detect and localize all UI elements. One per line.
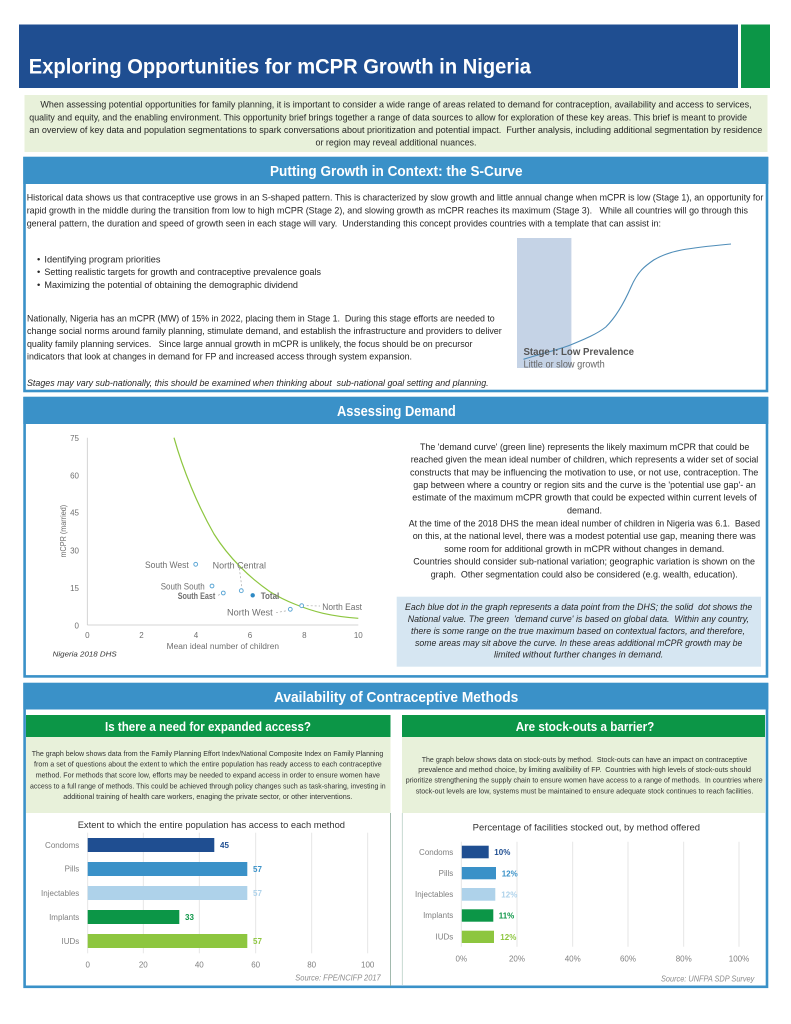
bar chart: stock-outs by method: Source: UNFPA SDP Survey: [661, 974, 755, 983]
sub-heading: stock-outs: Are stock-outs a barrier?: [516, 719, 654, 734]
bar chart: access by method: 0: [85, 960, 90, 970]
bar chart: stock-outs by method: 11%: [499, 912, 514, 920]
bullet list: Setting realistic targets for growth and contraceptive prevalence goals: [44, 266, 321, 277]
S-curve chart: Little or slow growth: [524, 358, 605, 370]
expanded access text: [30, 749, 386, 801]
bar chart: stock-outs by method: Percentage of facilities stocked out, by method offered: [473, 822, 700, 833]
demand curve scatter chart: Mean ideal number of children: [167, 642, 279, 651]
bar chart: stock-outs by method: [415, 822, 755, 983]
S-curve description: Historical data shows us that contraceptive use grows in an S-shaped pattern. This is characterized by slow growth and little annual change when mCPR is low (Stage 1), an opportunity for: [27, 192, 763, 203]
demand curve explanation: reached given the mean ideal number of children, which represents a wider set of social: [411, 454, 758, 465]
bar chart: access by method: 57: [253, 865, 262, 874]
demand curve scatter chart: South East: [178, 591, 215, 601]
demand curve scatter chart: South South: [161, 582, 205, 592]
callout: how to read the graph: some areas may sit above the curve. In these areas additional mCPR growth may be: [415, 638, 742, 648]
bar chart: access by method: Implants: [49, 913, 79, 922]
bar chart: stock-outs by method: 10%: [494, 848, 510, 857]
bar chart: stock-outs by method: Condoms: [419, 848, 453, 857]
title: Exploring Opportunities for mCPR Growth in Nigeria: [29, 54, 532, 78]
demand curve scatter chart: South West: [145, 560, 189, 570]
S-curve chart: Stage I: Low Prevalence: [524, 346, 634, 358]
bar chart: access by method: 57: [253, 937, 262, 946]
demand curve explanation: demand.: [567, 505, 602, 516]
title banner: [19, 24, 738, 88]
bar chart: access by method: [41, 819, 381, 983]
stock-outs text: stock-out levels are low, systems must be maintained to ensure adequate stock continues to reach facilities.: [416, 787, 753, 796]
bar chart: stock-outs by method: Implants: [423, 911, 453, 920]
panel: assessing demand: [23, 397, 768, 676]
heading: assessing demand: Assessing Demand: [337, 403, 456, 420]
demand curve scatter chart: 6: [248, 631, 253, 640]
italic note: Stages may vary sub-nationally, this should be examined when thinking about sub-national goal setting and planning.: [27, 378, 489, 388]
bullet list: •: [37, 266, 40, 277]
bar chart: stock-outs by method: 20%: [509, 955, 525, 964]
bar chart: stock-outs by method: IUDs: [436, 932, 453, 942]
intro text box: or region may reveal additional nuances.: [316, 137, 476, 148]
demand curve scatter chart: North East: [322, 602, 363, 612]
intro text box: quality and equity, and the enabling environment. This opportunity brief brings together a range of data sources to allow for exploration of these key areas. This brief is meant to provide: [29, 111, 747, 122]
bar chart: access by method: IUDs: [62, 937, 79, 946]
stock-outs text: prioritize strengthening the supply chain to ensure women have access to a range of methods. In countries where: [406, 776, 763, 785]
demand curve explanation: At the time of the 2018 DHS the mean ideal number of children in Nigeria was 6.1. Based: [409, 517, 760, 528]
demand curve explanation: gap between where a country or region sits and the curve is the 'potential use gap'- an: [413, 479, 756, 490]
stock-outs text: The graph below shows data on stock-outs by method. Stock-outs can have an impact on contraceptive: [422, 755, 747, 764]
Nigeria stage text: indicators that look at changes in demand for FP and increased access through system expansion.: [27, 350, 412, 362]
demand curve explanation: The 'demand curve' (green line) represents the likely maximum mCPR that could be: [420, 441, 749, 452]
expanded access text: from a set of questions about the extent to which the entire population has ready access to each contraceptive: [34, 760, 382, 769]
demand curve scatter chart: Nigeria 2018 DHS: [53, 650, 117, 658]
demand curve explanation: constructs that may be influencing the motivation to use, or not use, contraception. The: [410, 467, 758, 478]
demand curve scatter chart: 60: [70, 471, 80, 480]
demand curve explanation: Countries should consider sub-national variation; geographic variation is shown on the: [413, 556, 755, 567]
demand curve scatter chart: North Central: [213, 561, 266, 571]
sub-panel: stock-outs: [402, 715, 765, 985]
bar chart: stock-outs by method: 12%: [502, 870, 518, 878]
intro text box: an overview of key data and population segmentations to spark conversations about prioritization and potential impact. Further analysis, including additional segmentation by residence: [29, 124, 762, 135]
demand curve scatter chart: 45: [70, 509, 80, 518]
demand curve scatter chart: 30: [70, 546, 80, 555]
bar chart: stock-outs by method: 40%: [565, 955, 581, 964]
callout: how to read the graph: National value. The green 'demand curve' is based on global data. Within any country,: [408, 614, 749, 624]
demand curve scatter chart: 8: [302, 631, 307, 640]
demand curve scatter chart: 2: [139, 631, 144, 640]
demand curve explanation: graph. Other segmentation could also be considered (e.g. wealth, education).: [431, 568, 738, 579]
expanded access text: The graph below shows data from the Family Planning Effort Index/National Composite Index on Family Planning: [32, 749, 383, 758]
bar chart: stock-outs by method: Pills: [439, 869, 453, 878]
bar chart: access by method: 80: [307, 960, 317, 970]
S-curve description: general pattern, the duration and speed of growth seen in each stage will vary. Understanding this concept provides countries with a template that can assist in:: [27, 217, 661, 228]
bullet list: •: [37, 254, 40, 264]
bar chart: access by method: 57: [253, 889, 262, 898]
expanded access text: method. For methods that score low, efforts may be needed to expand access in order to ensure women have: [36, 770, 380, 779]
stock-outs text: prevalence and method choice, by limiting avalibility of FP. Countries with high levels of stock-outs should: [418, 765, 751, 774]
demand curve scatter chart: 0: [85, 631, 90, 640]
expanded access text: additional training of health care workers, enaging the private sector, or other interventions.: [63, 792, 352, 801]
demand curve scatter chart: 0: [75, 621, 80, 630]
bullet list: [37, 254, 321, 290]
callout: how to read the graph: [397, 597, 761, 667]
callout: how to read the graph: limited without further changes in demand.: [494, 649, 663, 659]
bar chart: access by method: 100: [361, 960, 375, 970]
demand curve scatter chart: 10: [354, 631, 363, 640]
bar chart: stock-outs by method: 12%: [501, 890, 517, 900]
bar chart: stock-outs by method: 12%: [500, 933, 516, 942]
bar chart: access by method: Condoms: [45, 841, 79, 850]
heading: S-curve: Putting Growth in Context: the S-Curve: [270, 163, 522, 180]
panel: S-curve context: [23, 157, 768, 391]
demand curve explanation: [409, 441, 760, 579]
bar chart: stock-outs by method: 80%: [676, 955, 692, 964]
bar chart: access by method: 45: [220, 841, 229, 850]
bar chart: access by method: Extent to which the entire population has access to each method: [78, 819, 345, 830]
S-curve description: [27, 192, 763, 228]
green accent block: [741, 24, 770, 88]
demand curve scatter chart: North West: [227, 608, 273, 618]
sub-heading: expanded access: Is there a need for expanded access?: [105, 719, 311, 734]
callout: how to read the graph: Each blue dot in the graph represents a data point from the DHS; the solid dot shows the: [405, 602, 752, 612]
demand curve scatter chart: mCPR (married): [59, 505, 68, 558]
demand curve scatter chart: 4: [194, 631, 199, 640]
sub-panel: expanded access: [26, 715, 391, 986]
S-curve chart: [517, 238, 731, 370]
demand curve scatter chart: 15: [70, 584, 80, 593]
demand curve scatter chart: [53, 434, 363, 658]
bar chart: stock-outs by method: 100%: [729, 955, 749, 964]
callout: how to read the graph: there is some range on the true maximum based on contextual factors, and therefore,: [411, 626, 745, 636]
demand curve explanation: some room for additional growth in mCPR without changes in demand.: [444, 543, 724, 554]
Nigeria stage text: change social norms around family planning, stimulate demand, and establish the infrastructure and providers to deliver: [27, 325, 502, 336]
intro text box: When assessing potential opportunities for family planning, it is important to consider a wide range of areas related to demand for contraception, availability and access to services,: [40, 99, 752, 110]
bullet list: Maximizing the potential of obtaining the demographic dividend: [44, 279, 298, 290]
demand curve scatter chart: 75: [70, 434, 80, 443]
Nigeria stage text: Nationally, Nigeria has an mCPR (MW) of 15% in 2022, placing them in Stage 1. During this stage efforts are needed to: [27, 312, 495, 324]
panel: availability of contraceptive methods: [23, 683, 768, 987]
bar chart: access by method: 33: [185, 913, 194, 922]
intro text box: [24, 95, 768, 152]
bar chart: stock-outs by method: 60%: [620, 955, 636, 964]
stock-outs text: [406, 755, 763, 796]
bullet list: •: [37, 279, 40, 290]
S-curve description: rapid growth in the middle during the transition from low to high mCPR (Stage 2), and slowing growth as mCPR reaches its maximum (Stage 3). While all countries will go through this: [27, 204, 748, 215]
heading: availability: Availability of Contraceptive Methods: [274, 689, 518, 706]
bar chart: stock-outs by method: 0%: [456, 955, 467, 964]
demand curve explanation: estimate of the maximum mCPR growth that could be expected within current levels of: [412, 492, 757, 503]
bar chart: access by method: Pills: [65, 864, 79, 874]
Nigeria stage text: [27, 312, 502, 362]
bar chart: access by method: Injectables: [41, 889, 79, 898]
demand curve scatter chart: Total: [261, 591, 279, 601]
bar chart: access by method: Source: FPE/NCIFP 2017: [295, 974, 381, 983]
demand curve explanation: on this, at the national level, there was a modest potential use gap, meaning there was: [413, 530, 756, 541]
bar chart: stock-outs by method: Injectables: [415, 890, 453, 899]
Nigeria stage text: quality family planning services. Since large annual growth in mCPR is unlikely, the focus should be on precursor: [27, 338, 472, 349]
bullet list: Identifying program priorities: [44, 254, 161, 264]
expanded access text: access to a full range of methods. This could be achieved through policy changes such as task-sharing, investing in: [30, 781, 386, 790]
bar chart: access by method: 20: [139, 960, 148, 970]
bar chart: access by method: 60: [251, 960, 261, 970]
bar chart: access by method: 40: [195, 960, 204, 970]
